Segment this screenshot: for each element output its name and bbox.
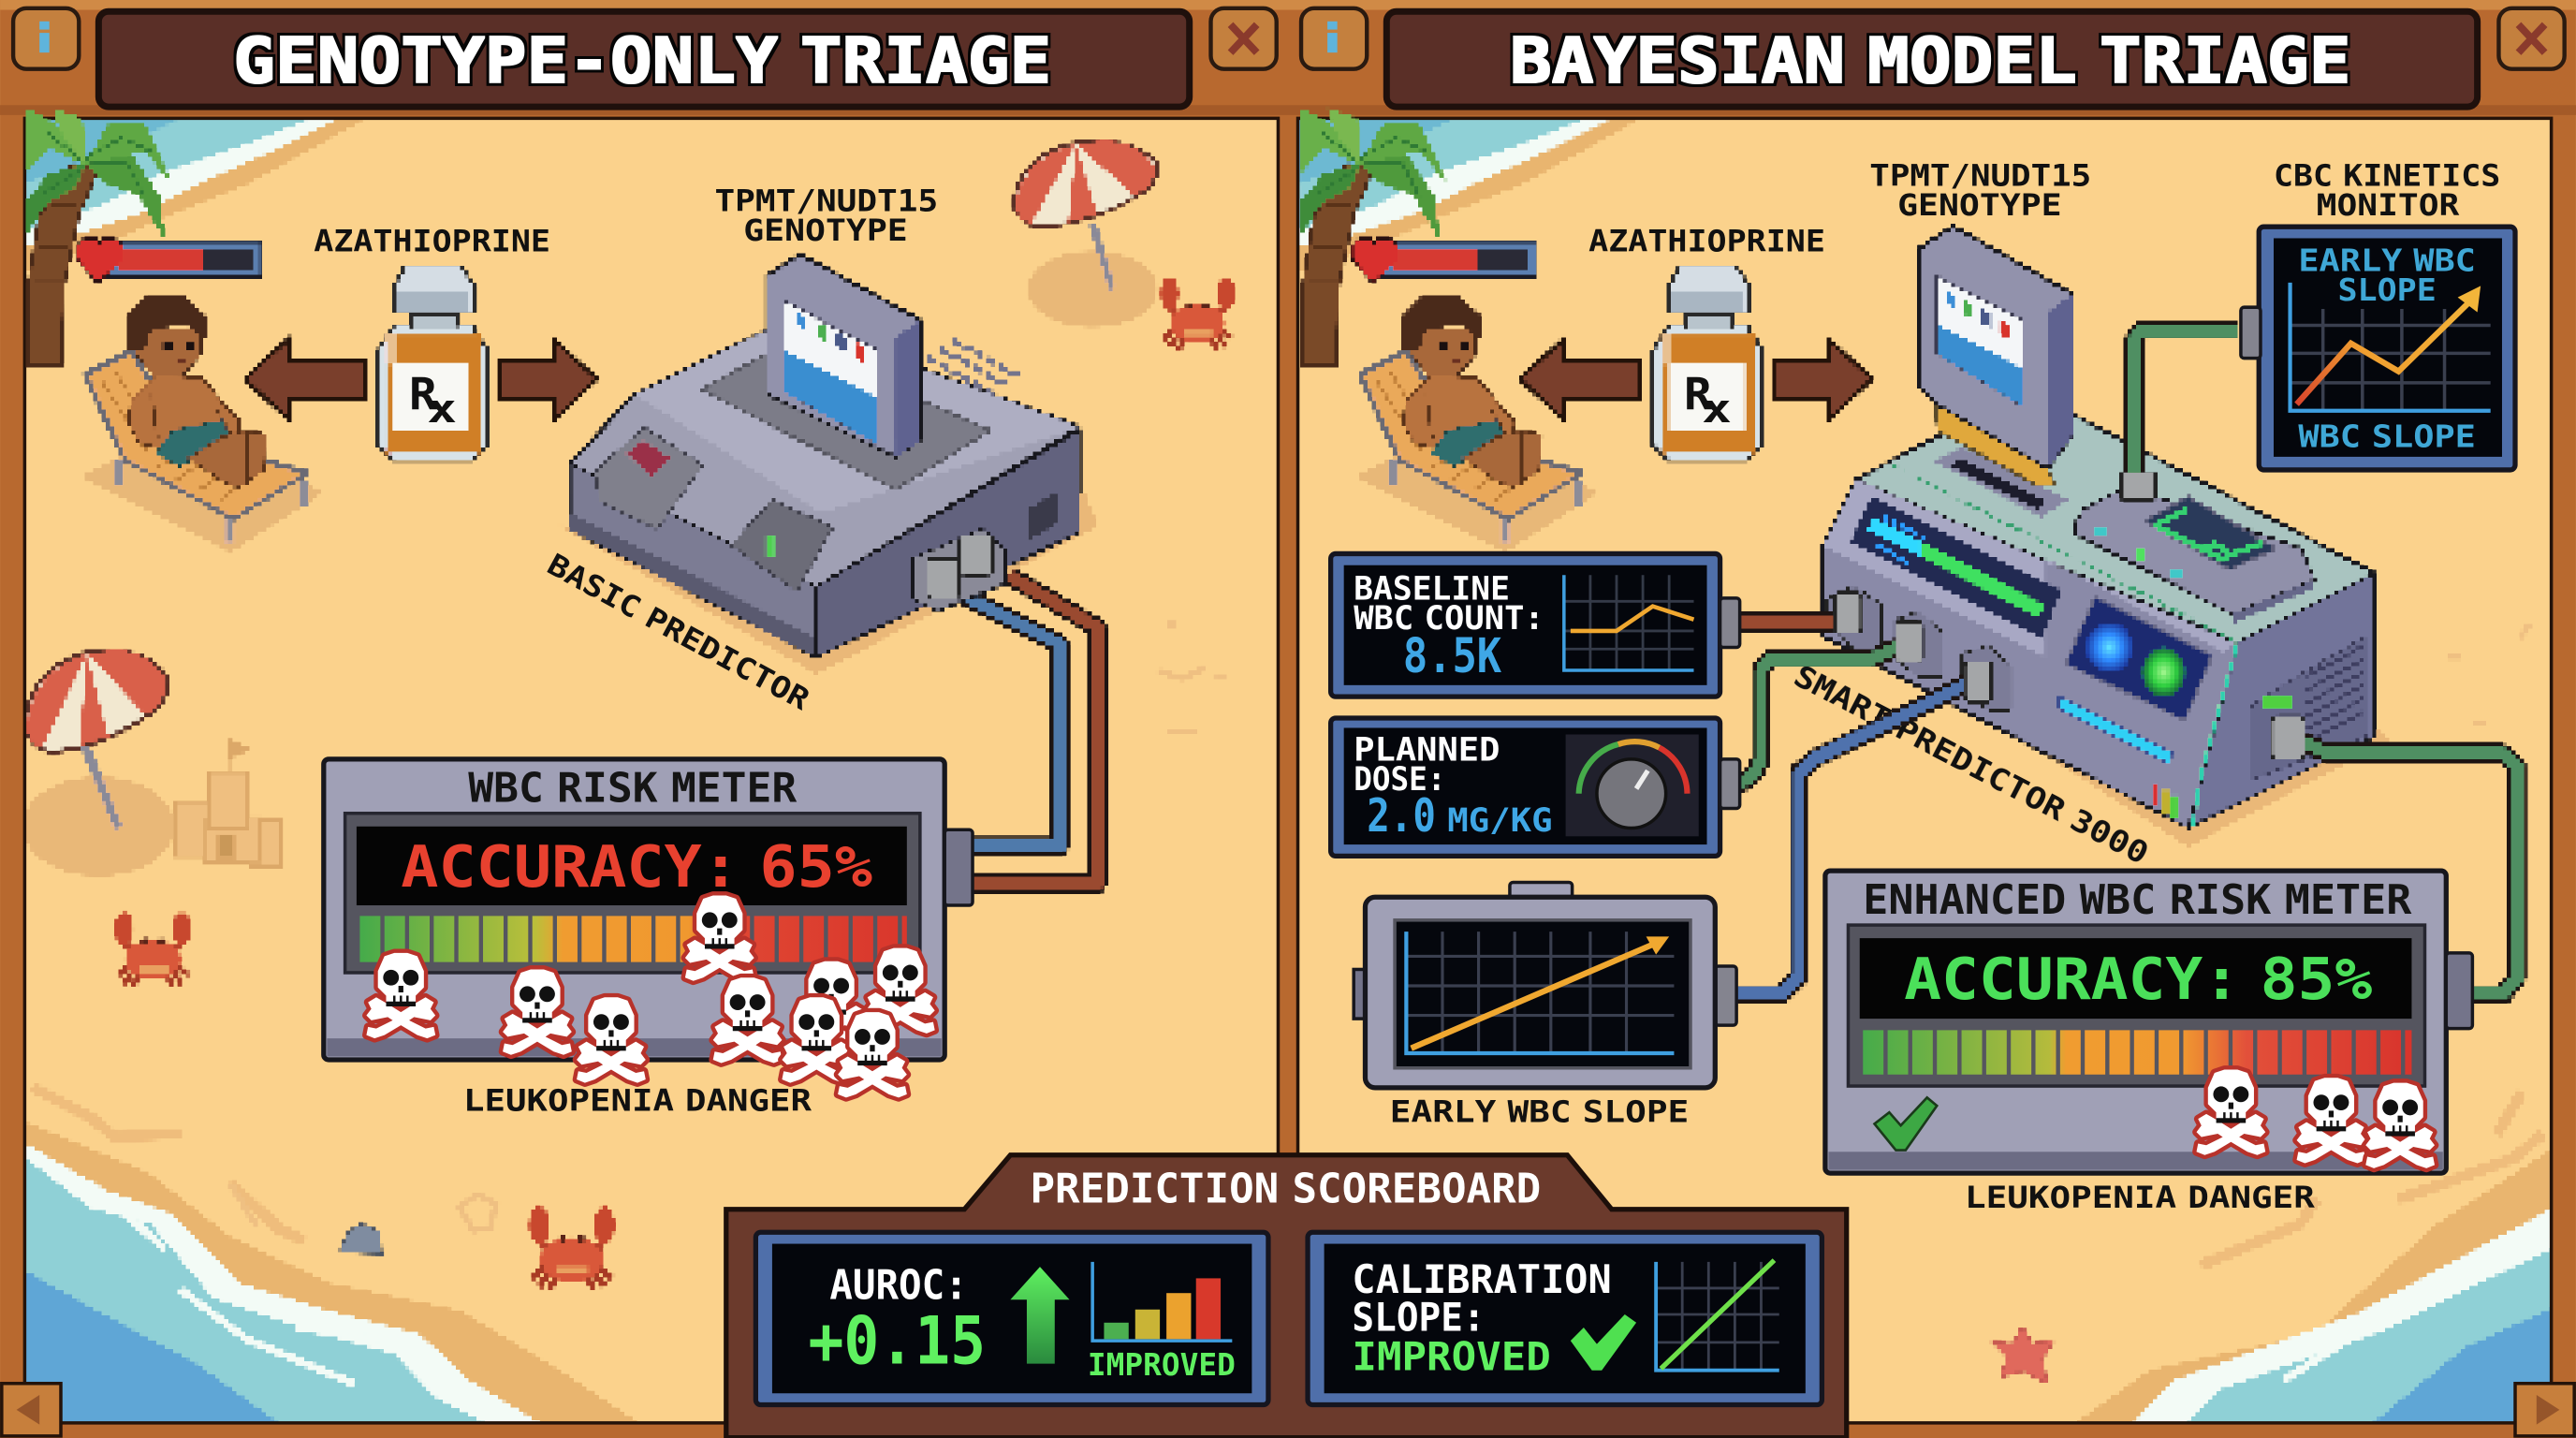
dose gauge — [1566, 734, 1699, 836]
AUROC bar chart — [1092, 1262, 1232, 1341]
vent and output port — [2152, 636, 2367, 825]
label: azathioprine right: AZATHIOPRINE — [1588, 226, 1825, 259]
right panel shoreline — [2076, 1093, 2552, 1423]
skull icons right — [2197, 1070, 2435, 1168]
calibration slope card: IMPROVED — [1352, 1334, 1551, 1380]
planned dose box: DOSE: — [1354, 760, 1445, 799]
genotype cartridge right — [1921, 227, 2071, 485]
label: early WBC slope: EARLY WBC SLOPE — [1390, 1096, 1689, 1130]
calibration slope card: SLOPE: — [1352, 1295, 1486, 1341]
scoreboard tab and body — [726, 1155, 1847, 1438]
title plaque right: BAYESIAN MODEL TRIAGE — [1510, 24, 2351, 97]
health bar right — [1352, 238, 1536, 283]
arrows left — [246, 339, 596, 420]
baseline WBC count box — [1331, 553, 1740, 697]
label: genotype left — [714, 185, 938, 248]
connector — [944, 829, 973, 905]
health bar left — [78, 238, 261, 283]
calibration slope card: CALIBRATION — [1352, 1256, 1612, 1302]
top control panel — [2075, 486, 2315, 624]
label: CBC kinetics monitor — [2274, 159, 2500, 223]
patient left — [82, 296, 322, 552]
accuracy readout: ACCURACY: 85% — [1904, 946, 2372, 1013]
accuracy readout: ACCURACY: 65% — [401, 834, 872, 901]
crab left — [115, 913, 191, 987]
smart predictor 3000 console — [1823, 416, 2391, 846]
baseline WBC count box: WBC COUNT: — [1354, 599, 1544, 638]
left panel water top — [24, 118, 365, 271]
plugs — [1835, 473, 2305, 759]
label: genotype right: TPMT/NUDT15 — [1869, 159, 2091, 193]
corner buttons — [2, 1384, 2574, 1436]
planned dose box: MG/KG — [1447, 801, 1553, 840]
AUROC card: +0.15 — [809, 1303, 986, 1380]
label: leukopenia danger left: LEUKOPENIA DANGER — [463, 1084, 812, 1118]
left panel shoreline — [24, 1088, 637, 1423]
crab top right — [1161, 278, 1235, 350]
AUROC card — [755, 1232, 1268, 1405]
patient right — [1357, 296, 1597, 552]
enhanced WBC risk meter — [1825, 871, 2472, 1173]
check mark — [1571, 1314, 1636, 1371]
palm tree right — [1299, 109, 1445, 365]
heading: ENHANCED WBC RISK METER — [1863, 876, 2412, 924]
calibration chart — [1656, 1260, 1779, 1371]
close button left — [1211, 8, 1277, 69]
label: smart predictor 3000: SMART PREDICTOR 3000 — [1788, 660, 2154, 872]
medicine bottle right: R — [1684, 369, 1712, 420]
calibration slope card — [1308, 1232, 1822, 1405]
planned dose box: PLANNED — [1354, 731, 1500, 770]
AUROC card: IMPROVED — [1088, 1346, 1236, 1383]
arrows right — [1521, 339, 1871, 420]
basic predictor console — [555, 255, 1097, 674]
starfish — [1993, 1328, 2054, 1384]
planned dose box: 2.0 — [1367, 788, 1436, 843]
close button right — [2498, 8, 2565, 69]
label: genotype left: TPMT/NUDT15 — [714, 185, 938, 219]
baseline WBC count box: BASELINE — [1354, 570, 1510, 609]
input ports — [1827, 585, 2011, 710]
cables: right panel — [1734, 330, 2517, 994]
info button right — [1301, 8, 1367, 69]
beach umbrella top right — [1014, 141, 1157, 327]
check mark — [1875, 1097, 1937, 1151]
crab bottom — [529, 1207, 614, 1290]
label: genotype right: GENOTYPE — [1897, 189, 2062, 223]
CBC kinetics monitor — [2241, 227, 2515, 470]
CBC kinetics monitor: SLOPE — [2337, 271, 2437, 308]
label: CBC kinetics monitor: MONITOR — [2317, 189, 2460, 223]
label: basic predictor: BASIC PREDICTOR — [542, 548, 815, 718]
status orbs — [2058, 596, 2213, 764]
label: azathioprine left: AZATHIOPRINE — [314, 226, 550, 259]
early WBC slope device — [1354, 882, 1736, 1088]
info button left — [13, 8, 79, 69]
prediction scoreboard — [726, 1155, 1847, 1438]
risk gradient bar — [359, 926, 907, 952]
WBC risk meter left — [324, 759, 973, 1060]
sand ripples and shell — [230, 624, 2530, 1231]
medicine bottle right — [1653, 266, 1763, 460]
medicine bottle left: R — [409, 369, 437, 420]
beach umbrella left — [23, 651, 174, 875]
label: CBC kinetics monitor: CBC KINETICS — [2274, 159, 2500, 193]
skull icons left — [366, 895, 935, 1097]
label: genotype right — [1869, 159, 2091, 223]
status display bar — [1850, 496, 2062, 639]
baseline WBC count box: 8.5K — [1403, 629, 1501, 684]
title plaque right — [1386, 11, 2478, 107]
medicine bottle right: x — [1702, 386, 1732, 432]
connector — [2446, 953, 2472, 1029]
medicine bottle left: x — [427, 386, 457, 432]
AUROC card: AUROC: — [829, 1261, 968, 1309]
title plaque left: GENOTYPE-ONLY TRIAGE — [233, 24, 1051, 97]
planned dose box — [1331, 718, 1740, 856]
medicine bottle left — [378, 266, 488, 460]
cables: basic predictor to risk meter — [940, 566, 1097, 884]
CBC kinetics monitor: WBC SLOPE — [2298, 418, 2476, 454]
heading: WBC RISK METER — [468, 764, 798, 812]
title plaque left — [98, 11, 1190, 107]
CBC kinetics monitor: EARLY WBC — [2298, 242, 2476, 279]
scoreboard heading: PREDICTION SCOREBOARD — [1030, 1166, 1541, 1213]
label: leukopenia danger right: LEUKOPENIA DANGER — [1965, 1181, 2316, 1215]
cartridge — [768, 255, 920, 457]
sand castle — [176, 741, 279, 866]
label: genotype left: GENOTYPE — [743, 214, 908, 248]
right panel water top — [1299, 118, 1640, 271]
up arrow — [1010, 1267, 1070, 1364]
palm tree left — [24, 109, 171, 365]
risk gradient bar — [1863, 1040, 2411, 1065]
rock — [340, 1224, 381, 1254]
